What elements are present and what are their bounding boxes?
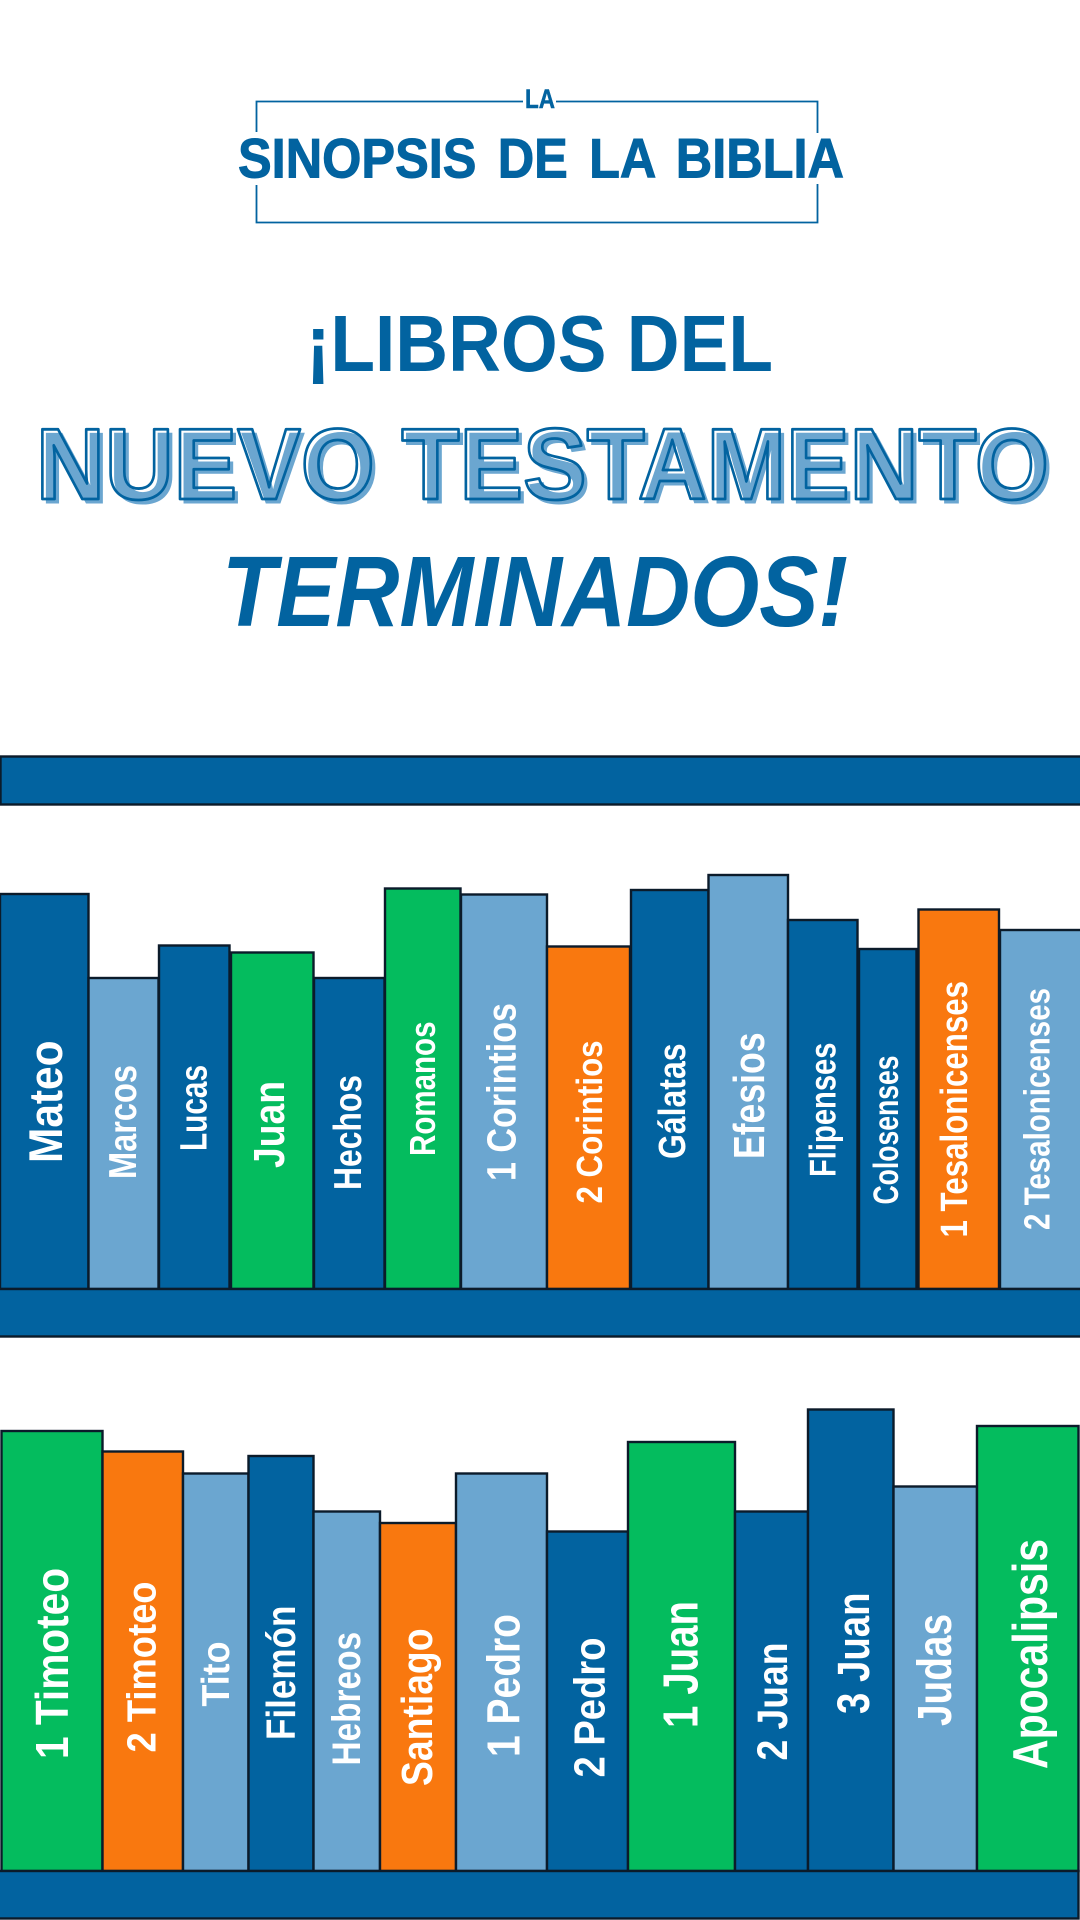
shelf: bottom board: [0, 1871, 1078, 1918]
logo: La Sinopsis de la Biblia: SINOPSIS DE LA BIBLIA: [238, 126, 844, 190]
shelf: middle board: [0, 1289, 1080, 1336]
book: 1 Timoteo: [2, 1431, 102, 1871]
book: Judas: [894, 1486, 977, 1871]
book: 1 Tesalonicenses: 1 Tesalonicenses: [934, 981, 976, 1238]
book: 1 Juan: [628, 1442, 735, 1871]
book: Mateo: [0, 894, 88, 1289]
book: 1 Corintios: 1 Corintios: [478, 1003, 524, 1181]
book: 1 Pedro: 1 Pedro: [478, 1614, 530, 1757]
book: 2 Tesalonicenses: [1000, 930, 1080, 1289]
book: Lucas: [159, 946, 230, 1289]
book: 3 Juan: [808, 1410, 894, 1871]
book: Santiago: [380, 1523, 456, 1871]
book: Gálatas: Gálatas: [652, 1044, 694, 1159]
book: 1 Juan: 1 Juan: [654, 1601, 708, 1728]
book: 1 Corintios: [461, 894, 547, 1289]
shelf: top board: [0, 756, 1080, 804]
logo: La Sinopsis de la Biblia: [238, 84, 844, 222]
book: 2 Timoteo: 2 Timoteo: [118, 1582, 164, 1752]
book: Apocalipsis: [977, 1426, 1078, 1871]
book: 1 Tesalonicenses: [918, 910, 999, 1289]
book: Romanos: Romanos: [402, 1022, 443, 1156]
book: Efesios: Efesios: [725, 1033, 774, 1159]
heading line 2: outlined Nuevo Testamento: NUEVO TESTAMENTO: [36, 409, 1049, 521]
book: 2 Corintios: [547, 946, 630, 1289]
book: 2 Tesalonicenses: 2 Tesalonicenses: [1016, 988, 1058, 1230]
book: Tito: [183, 1474, 248, 1871]
book: Hechos: [314, 978, 384, 1289]
book: Hebreos: [314, 1512, 380, 1871]
book: Hechos: Hechos: [327, 1075, 370, 1190]
book: 1 Timoteo: 1 Timoteo: [26, 1568, 78, 1759]
book: Juan: [231, 952, 314, 1289]
book: Colosenses: [859, 949, 916, 1289]
book: Hebreos: Hebreos: [325, 1632, 369, 1766]
book: Marcos: [88, 978, 158, 1289]
book: Colosenses: Colosenses: [867, 1056, 906, 1204]
book: 1 Pedro: [456, 1474, 547, 1871]
book: Judas: Judas: [909, 1614, 962, 1726]
book: Juan: Juan: [245, 1081, 294, 1168]
book: 2 Pedro: 2 Pedro: [566, 1638, 614, 1778]
book: Gálatas: [631, 890, 708, 1289]
book: 2 Corintios: 2 Corintios: [569, 1040, 610, 1204]
logo: La Sinopsis de la Biblia: LA: [525, 84, 555, 114]
book: 2 Juan: 2 Juan: [749, 1642, 797, 1760]
book: Filipenses: Flipenses: [802, 1042, 844, 1177]
book: Lucas: Lucas: [174, 1065, 216, 1151]
book: Romanos: [385, 888, 460, 1289]
book: Tito: Tito: [195, 1642, 238, 1706]
book: Mateo: Mateo: [19, 1040, 72, 1163]
book: Efesios: [708, 875, 788, 1289]
book: 2 Pedro: [547, 1532, 628, 1871]
book: 2 Juan: [735, 1512, 808, 1871]
book: Filemón: [248, 1456, 314, 1871]
book: 2 Timoteo: [102, 1452, 183, 1871]
book: Santiago: Santiago: [393, 1628, 442, 1786]
book: Filipenses: [788, 920, 858, 1289]
book: Apocalipsis: Apocalipsis: [1004, 1539, 1058, 1769]
heading line 2: outlined Nuevo Testamento: NUEVO TESTAMENTO: [36, 409, 1049, 521]
book: 3 Juan: 3 Juan: [828, 1592, 879, 1714]
book: Marcos: Marcos: [102, 1065, 145, 1179]
book: Filemón: Filemón: [258, 1606, 304, 1740]
heading line 3: TERMINADOS!: [222, 536, 848, 648]
heading line 1: ¡LIBROS DEL: [306, 299, 773, 388]
